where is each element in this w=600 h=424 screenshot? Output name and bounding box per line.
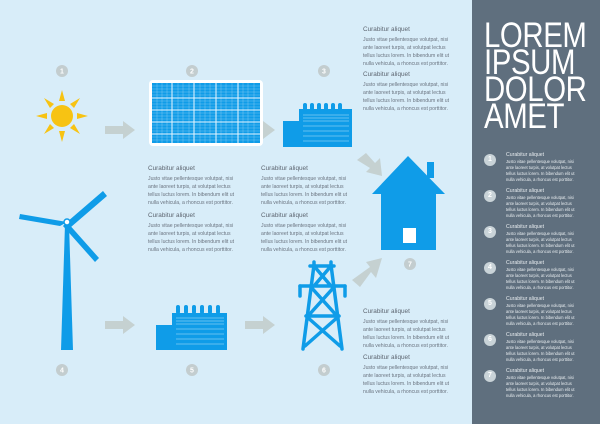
sidebar: Curabitur aliquet [506,260,544,266]
icon: power plant [283,103,352,147]
sidebar: Justo vitae pellentesque volutpat, nisi [506,159,574,164]
sidebar: ante laoreet turpis, at volutpat lectus [506,237,572,242]
sidebar: ante laoreet turpis, at volutpat lectus [506,345,572,350]
title [484,16,586,136]
icon: house [372,156,445,250]
text: tellus luctus lorem. In bibendum elit ut [363,335,449,341]
sidebar: nulla vehicula, a rhoncus est porttitor. [506,213,574,218]
sidebar: nulla vehicula, a rhoncus est porttitor. [506,321,574,326]
icon: sun [36,90,88,142]
title: IPSUM [484,43,575,82]
text: Curabitur aliquet [261,212,308,219]
sidebar: Justo vitae pellentesque volutpat, nisi [506,375,574,380]
sidebar: Justo vitae pellentesque volutpat, nisi [506,339,574,344]
sidebar: nulla vehicula, a rhoncus est porttitor. [506,249,574,254]
sidebar: nulla vehicula, a rhoncus est porttitor. [506,357,574,362]
text: tellus luctus lorem. In bibendum elit ut [148,239,234,245]
sidebar: nulla vehicula, a rhoncus est porttitor. [506,177,574,182]
sidebar: nulla vehicula, a rhoncus est porttitor. [506,393,574,398]
text: nulla vehicula, a rhoncus est porttitor. [261,200,346,206]
sidebar: tellus luctus lorem. In bibendum elit ut [506,387,574,392]
text: Justo vitae pellentesque volutpat, nisi [261,176,346,182]
number badges: 5 [190,368,194,374]
icon: power plant 2 [156,305,227,350]
text: ante laoreet turpis, at volutpat lectus [261,184,344,190]
text: ante laoreet turpis, at volutpat lectus [261,231,344,237]
text: Justo vitae pellentesque volutpat, nisi [261,223,346,229]
title: DOLOR [484,70,586,109]
arrows [105,121,382,334]
sidebar: Curabitur aliquet [506,332,544,338]
text: Justo vitae pellentesque volutpat, nisi [363,319,448,325]
text blocks: tellus luctus lorem. In bibendum elit ut [363,53,449,59]
text: nulla vehicula, a rhoncus est porttitor. [261,247,346,253]
text: tellus luctus lorem. In bibendum elit ut [261,192,347,198]
text: ante laoreet turpis, at volutpat lectus [148,184,231,190]
sidebar: Justo vitae pellentesque volutpat, nisi [506,195,574,200]
sidebar: Justo vitae pellentesque volutpat, nisi [506,267,574,272]
sidebar: Curabitur aliquet [506,368,544,374]
sidebar: nulla vehicula, a rhoncus est porttitor. [506,285,574,290]
number badges: 7 [408,262,412,268]
number badges [56,65,416,376]
number badges: 1 [60,68,64,76]
text: tellus luctus lorem. In bibendum elit ut [363,98,449,104]
title: AMET [484,97,564,136]
sidebar: 6 [488,336,492,343]
sidebar: 5 [488,300,492,307]
text blocks: Justo vitae pellentesque volutpat, nisi [363,37,448,43]
text: tellus luctus lorem. In bibendum elit ut [261,239,347,245]
text: Justo vitae pellentesque volutpat, nisi [148,176,233,182]
icon: wind turbine [19,191,107,350]
list items [484,152,574,182]
text: Curabitur aliquet [363,308,410,315]
text blocks [363,26,449,67]
sidebar: tellus luctus lorem. In bibendum elit ut [506,207,574,212]
text: nulla vehicula, a rhoncus est porttitor. [148,200,233,206]
icon: pylon [300,262,345,349]
text: nulla vehicula, a rhoncus est porttitor. [148,247,233,253]
text: ante laoreet turpis, at volutpat lectus [148,231,231,237]
number badges: 4 [60,368,64,374]
sidebar: Justo vitae pellentesque volutpat, nisi [506,231,574,236]
text: ante laoreet turpis, at volutpat lectus [363,373,446,379]
sidebar: tellus luctus lorem. In bibendum elit ut [506,315,574,320]
sidebar [472,0,600,424]
text: Curabitur aliquet [363,354,410,361]
text: Curabitur aliquet [148,165,195,172]
number badges: 3 [322,68,326,76]
sidebar: ante laoreet turpis, at volutpat lectus [506,165,572,170]
icon: solar panel [149,80,263,146]
text: nulla vehicula, a rhoncus est porttitor. [363,389,448,395]
text: Curabitur aliquet [148,212,195,219]
sidebar: Curabitur aliquet [506,152,544,158]
text: tellus luctus lorem. In bibendum elit ut [363,381,449,387]
text: Curabitur aliquet [363,71,410,78]
sidebar: Curabitur aliquet [506,224,544,230]
text: Justo vitae pellentesque volutpat, nisi [363,365,448,371]
text blocks: nulla vehicula, a rhoncus est porttitor. [363,61,448,67]
text: ante laoreet turpis, at volutpat lectus [363,90,446,96]
sidebar: Curabitur aliquet [506,296,544,302]
text blocks: ante laoreet turpis, at volutpat lectus [363,45,446,51]
diagram [19,65,445,376]
sidebar: tellus luctus lorem. In bibendum elit ut [506,243,574,248]
sidebar: Justo vitae pellentesque volutpat, nisi [506,303,574,308]
sidebar: 3 [488,228,492,235]
number badges: 6 [322,368,326,374]
number badges: 2 [190,68,194,76]
sidebar: 1 [488,156,492,163]
title: LOREM [484,16,586,55]
sidebar: ante laoreet turpis, at volutpat lectus [506,309,572,314]
sidebar: 2 [488,192,492,199]
sidebar: tellus luctus lorem. In bibendum elit ut [506,171,574,176]
sidebar: tellus luctus lorem. In bibendum elit ut [506,279,574,284]
text: Justo vitae pellentesque volutpat, nisi [363,82,448,88]
sidebar: tellus luctus lorem. In bibendum elit ut [506,351,574,356]
text: Curabitur aliquet [261,165,308,172]
text: ante laoreet turpis, at volutpat lectus [363,327,446,333]
text blocks: Curabitur aliquet [363,26,410,33]
sidebar: Curabitur aliquet [506,188,544,194]
text: nulla vehicula, a rhoncus est porttitor. [363,343,448,349]
sidebar: ante laoreet turpis, at volutpat lectus [506,381,572,386]
sidebar: 7 [488,372,492,379]
text: Justo vitae pellentesque volutpat, nisi [148,223,233,229]
sidebar: 4 [488,264,492,271]
text: nulla vehicula, a rhoncus est porttitor. [363,106,448,112]
text: tellus luctus lorem. In bibendum elit ut [148,192,234,198]
sidebar: ante laoreet turpis, at volutpat lectus [506,201,572,206]
sidebar: ante laoreet turpis, at volutpat lectus [506,273,572,278]
